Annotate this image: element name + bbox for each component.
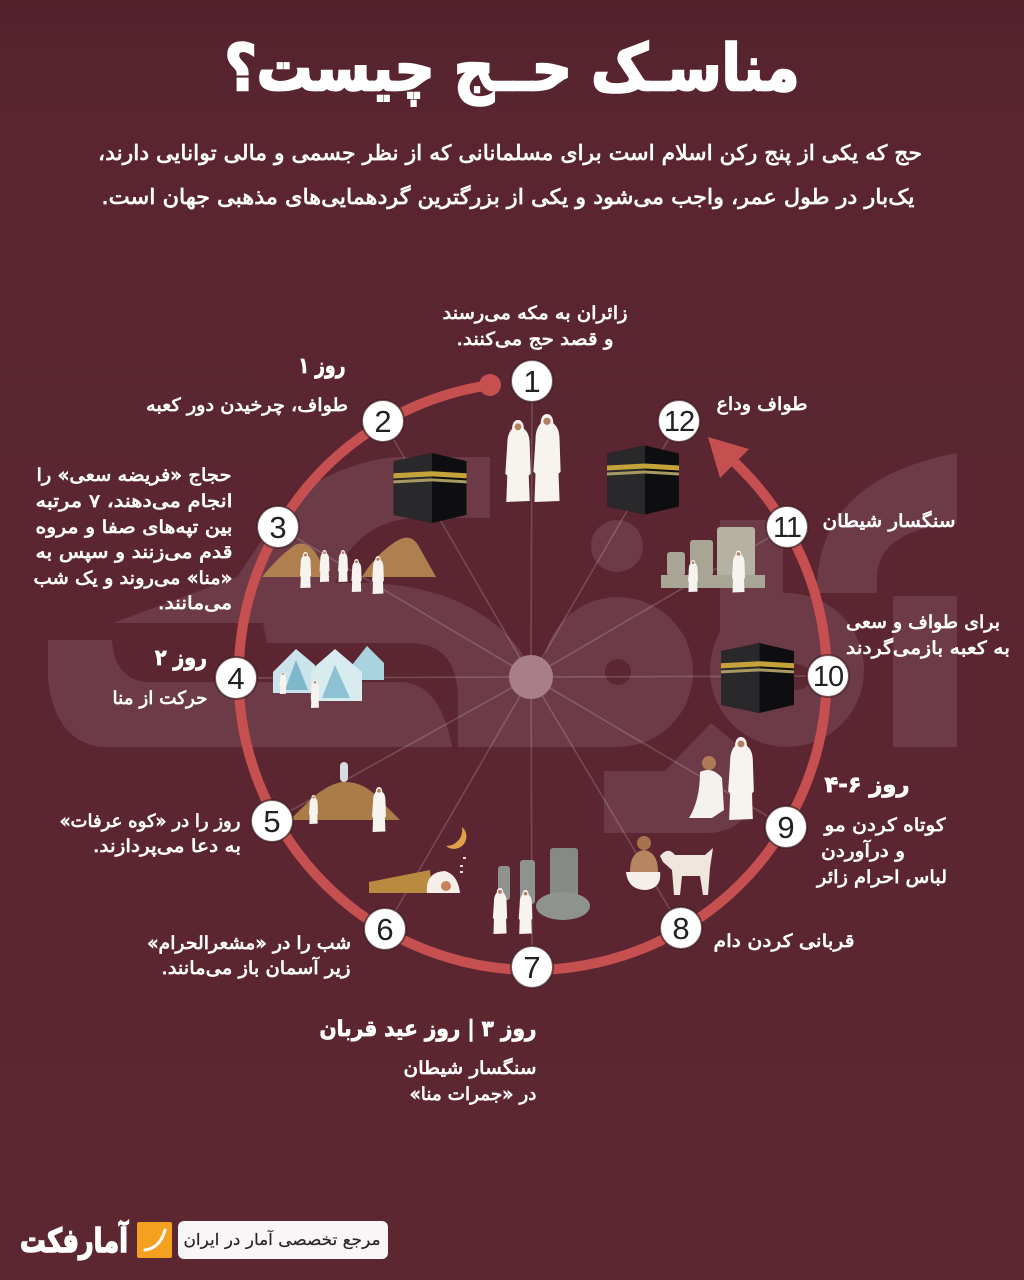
label step 3: انجام می‌دهند، ۷ مرتبه (36, 491, 233, 512)
numbered nodes: 4 (227, 661, 245, 696)
label step 2: طواف، چرخیدن دور کعبه (146, 395, 348, 416)
day 3 heading: روز ۳ | روز عید قربان (320, 1017, 536, 1042)
spokes (236, 381, 828, 967)
label step 9: و درآوردن (821, 839, 905, 862)
label step 3: «منا» می‌روند و یک شب (34, 568, 232, 589)
numbered nodes: 1 (523, 364, 541, 399)
watermark logo (48, 453, 957, 833)
label step 9: کوتاه کردن مو (823, 815, 946, 836)
icon: kaaba step 12 (607, 446, 679, 514)
icon: hair cutting (689, 737, 754, 820)
label step 1 (442, 303, 628, 350)
label step 1: زائران به مکه می‌رسند (442, 303, 628, 324)
label step 10: به کعبه بازمی‌گردند (846, 637, 1010, 659)
label step 8: قربانی کردن دام (714, 931, 854, 952)
day 4-6 heading: روز ۶-۴ (824, 773, 910, 798)
footer orange icon (137, 1222, 172, 1258)
label step 5: روز را در «کوه عرفات» (60, 811, 240, 832)
label step 4: حرکت از منا (112, 688, 208, 709)
icon: pilgrims at step 1 (505, 414, 561, 502)
label step 11: سنگسار شیطان (822, 510, 956, 532)
icon: tents of Mina (273, 646, 384, 708)
watermark holes (605, 659, 810, 690)
label step 1: و قصد حج می‌کنند. (456, 329, 614, 350)
numbered nodes: 8 (672, 911, 690, 946)
label step 5 (60, 811, 241, 857)
timeline ring with arrow (239, 374, 827, 970)
intro text: یک‌بار در طول عمر، واجب می‌شود و یکی از بزرگترین گردهمایی‌های مذهبی جهان است. (102, 185, 915, 209)
numbered nodes: 11 (773, 512, 801, 544)
icon: stoning pillars (493, 848, 590, 934)
numbered nodes: 9 (777, 810, 795, 845)
label step 7: در «جمرات منا» (410, 1084, 536, 1105)
icon: Mount Arafat (290, 762, 400, 832)
label step 6 (147, 933, 351, 979)
label step 12: طواف وداع (716, 394, 808, 415)
icon: sacrifice man and goat (626, 836, 713, 895)
icon: kaaba step 2 (393, 453, 467, 523)
title: مناسـک حــج چیست؟ (224, 32, 800, 106)
label step 9 (816, 815, 947, 888)
intro text (98, 141, 922, 209)
intro text: حج که یکی از پنج رکن اسلام است برای مسلمانانی که از نظر جسمی و مالی توانایی دارند، (98, 141, 922, 165)
label step 5: به دعا می‌پردازند. (93, 836, 241, 857)
label step 3: بین تپه‌های صفا و مروه (36, 517, 232, 538)
label step 3: حجاج «فریضه سعی» را (36, 465, 232, 486)
label step 9: لباس احرام زائر (816, 867, 947, 888)
numbered nodes: 7 (523, 950, 541, 985)
label step 3: می‌مانند. (158, 593, 232, 614)
label step 10 (846, 612, 1010, 659)
numbered nodes: 6 (376, 912, 394, 947)
footer logo wordmark: آمارفکت (20, 1220, 129, 1260)
numbered nodes: 2 (374, 404, 392, 439)
footer tagline: مرجع تخصصی آمار در ایران (184, 1230, 380, 1250)
numbered nodes (215, 360, 849, 988)
numbered nodes: 10 (813, 661, 843, 693)
center hub (509, 655, 553, 699)
label step 3 (34, 465, 232, 614)
icon: Safa and Marwa hills (262, 538, 436, 594)
label step 3: قدم می‌زنند و سپس به (36, 542, 232, 563)
icon: stoning pillars step 11 (661, 527, 765, 592)
icon: sleeping pilgrim under crescent (369, 827, 466, 893)
footer tagline (178, 1221, 388, 1259)
numbered nodes: 3 (269, 510, 287, 545)
label step 6: زیر آسمان باز می‌مانند. (162, 956, 350, 979)
label step 6: شب را در «مشعرالحرام» (147, 933, 351, 954)
icon: kaaba step 10 (721, 643, 794, 713)
label step 7: سنگسار شیطان (404, 1057, 536, 1079)
day 2 heading: روز ۲ (155, 646, 207, 671)
day 1 heading: روز ۱ (298, 354, 346, 379)
label step 10: برای طواف و سعی (846, 612, 1000, 633)
numbered nodes: 5 (263, 804, 281, 839)
numbered nodes: 12 (664, 406, 694, 438)
label step 7 (404, 1057, 536, 1105)
